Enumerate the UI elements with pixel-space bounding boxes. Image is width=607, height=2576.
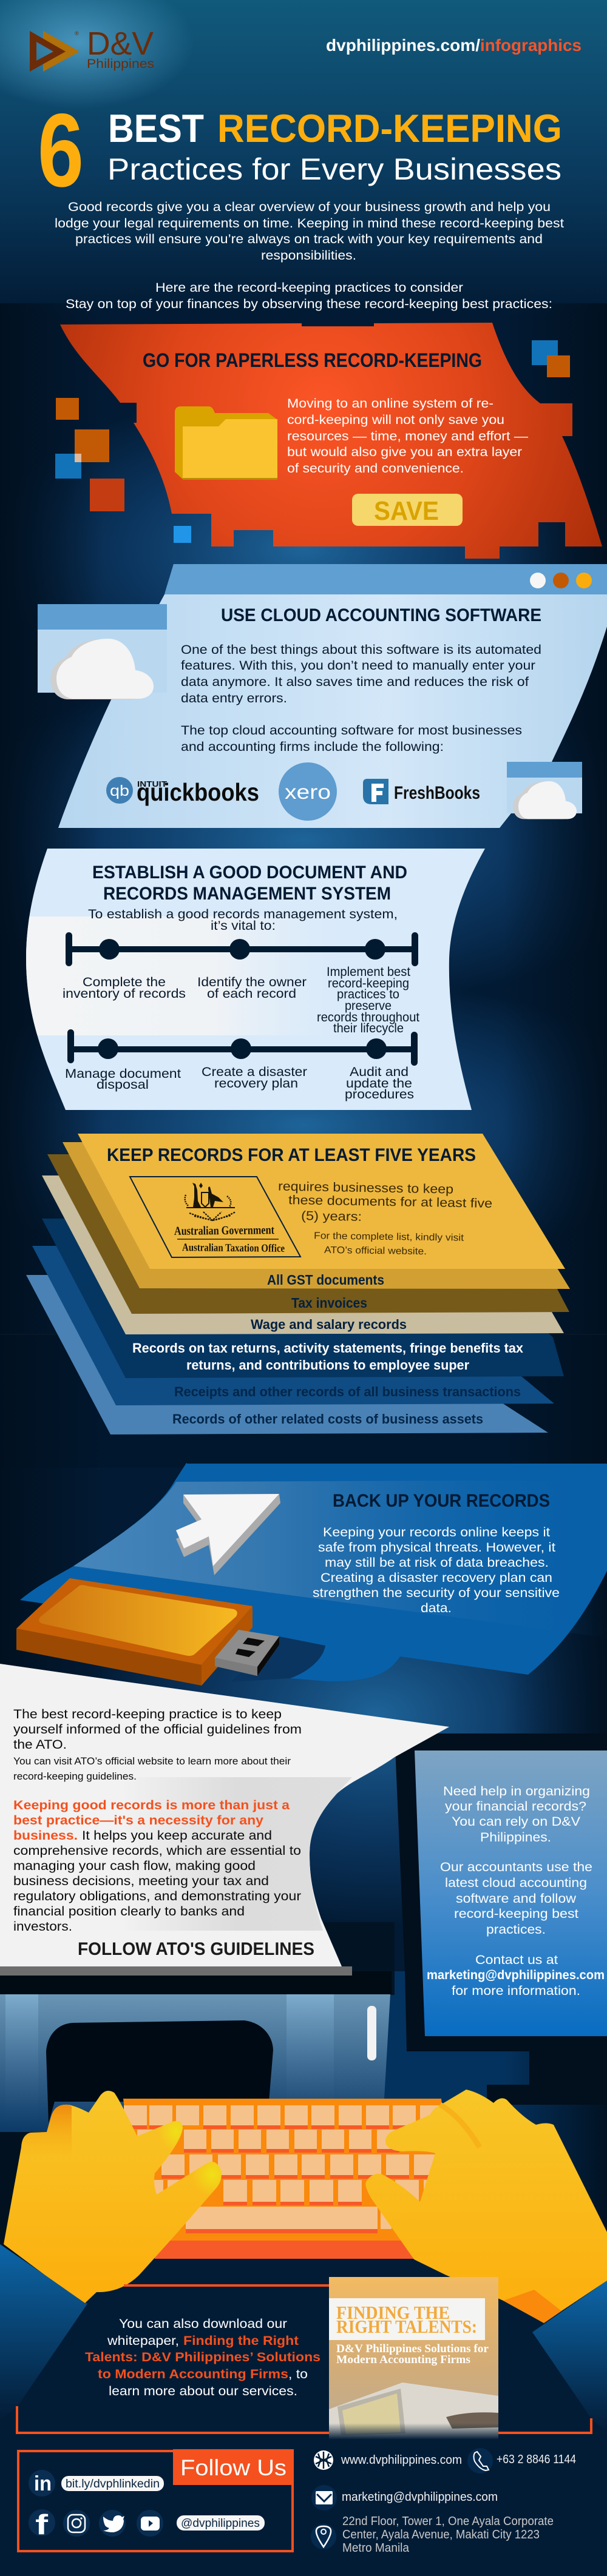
contact details: marketing@dvphilippines.com [342,2490,498,2504]
whitepaper cover: FINDING THE [336,2302,450,2323]
layer: top sheet [78,1134,565,1269]
decorative pixels [55,340,570,543]
intro paragraph: lodge your legal requirements on time. Keeping in mind these record-keeping best [55,216,564,230]
panel: follow ATO guidelines: regulatory obligations, and demonstrating your [13,1889,301,1903]
layer: tax returns: returns, and contributions to employee super [186,1357,469,1373]
panel: follow ATO guidelines: You can visit ATO’s official website to learn more about their [13,1755,291,1767]
whitepaper cover: Modern Accounting Firms [336,2353,470,2366]
panel: whitepaper frame [17,2277,592,2440]
linkedin pill: bit.ly/dvphlinkedin [66,2478,160,2490]
website url: infographics [480,36,582,55]
logo: D&V Philippines [30,25,154,72]
heading [92,863,407,904]
panel: follow us [18,2449,294,2551]
panel: monitor call to action: Philippines. [480,1830,551,1845]
layer: GST documents: All GST documents [267,1272,384,1288]
layer: business transactions: Receipts and other records of all business transactions [174,1384,521,1399]
requirement text [278,1180,492,1257]
layer: wage and salary: Wage and salary records [251,1317,407,1332]
icon: right hand [365,2090,607,2323]
panel: back up your records [20,1463,607,1682]
icon: small cloud window [507,762,582,819]
laptop screen [0,1994,390,2132]
body text: may still be at risk of data breaches. [325,1556,549,1570]
layer: GST documents [63,1142,570,1289]
body text: resources — time, money and effort — [287,429,529,443]
timeline top labels: records throughout [317,1011,419,1024]
panel: go for paperless [55,323,602,559]
timeline bottom labels: recovery plan [214,1077,298,1091]
icon: linkedin [29,2470,55,2497]
layer: tax invoices [47,1154,569,1314]
website url: dvphilippines.com/ [326,36,480,55]
whitepaper text: You can also download our [119,2316,287,2331]
timeline top labels: their lifecycle [333,1021,404,1035]
timeline top labels: of each record [207,987,296,1001]
contact details: 22nd Floor, Tower 1, One Ayala Corporate [342,2515,554,2528]
whitepaper cover: D&V Philippines Solutions for [336,2342,489,2355]
panel: follow ATO guidelines: managing your cash flow, making good [13,1858,256,1873]
icon: folder [175,406,277,480]
body text: strengthen the security of your sensitive [313,1586,560,1600]
layer: tax returns [42,1219,564,1378]
intro text: it’s vital to: [211,919,276,933]
icon: coat of arms [185,1183,236,1220]
orange shape [60,323,602,559]
timeline top labels: Implement best [327,965,410,979]
panel: cloud accounting [38,564,607,828]
panel: monitor call to action: software and follow [456,1891,577,1906]
timeline bottom labels [65,1065,414,1101]
heading: KEEP RECORDS FOR AT LEAST FIVE YEARS [107,1145,476,1165]
save button [352,494,463,526]
heading: GO FOR PAPERLESS RECORD-KEEPING [143,349,482,371]
panel: follow ATO guidelines: record-keeping guidelines. [13,1771,137,1782]
ATO logo box [130,1177,300,1257]
layer: business assets [26,1275,548,1434]
body text: data. [421,1601,452,1615]
body text [313,1525,560,1615]
body text: and accounting firms include the following: [181,739,444,754]
timeline bottom labels: disposal [97,1078,149,1092]
icon: instagram [63,2510,90,2537]
panel: document management system [24,849,485,1110]
contact details [311,2448,576,2555]
panel: monitor call to action: Contact us at [475,1952,558,1967]
timeline bottom [67,1029,418,1066]
timeline top labels: Identify the owner [197,975,307,989]
requirement text: requires businesses to keep [278,1180,453,1197]
whitepaper text: , to [288,2367,308,2381]
panel: monitor call to action: practices. [486,1922,546,1937]
body text: of security and convenience. [287,461,464,476]
monitor frame and stand [0,1734,607,2105]
panel: follow ATO guidelines: investors. [13,1919,72,1934]
timeline bottom labels: Create a disaster [202,1065,307,1079]
ATO logo box: Australian Taxation Office [182,1241,285,1254]
logo: quickbooks: quickbooks [137,778,259,806]
timeline bottom labels: Audit and [350,1065,409,1079]
icon: twitter [99,2510,126,2537]
requirement text: ATO’s official website. [324,1245,427,1257]
panel: monitor call to action: Our accountants use the [440,1860,592,1874]
title: Practices for Every Businesses [107,152,561,186]
timeline bottom labels: procedures [345,1088,414,1101]
body text: cord-keeping will not only save you [287,412,504,427]
title: BEST [108,106,204,150]
heading: RECORDS MANAGEMENT SYSTEM [103,884,391,904]
body text: The top cloud accounting software for most businesses [181,723,522,738]
timeline top labels: preserve [345,999,392,1013]
contact details: +63 2 8846 1144 [497,2453,576,2466]
title [38,92,562,209]
body text: Creating a disaster recovery plan can [320,1571,552,1585]
whitepaper text [85,2316,320,2398]
whitepaper text: Talents: D&V Philippines’ Solutions [85,2350,320,2364]
intro text [88,907,398,933]
timeline bottom labels: Manage document [65,1067,181,1081]
timeline bottom labels: update the [346,1077,412,1091]
body text: One of the best things about this software is its automated [181,642,541,657]
panel: follow ATO guidelines: business decisions, meeting your tax and [13,1874,269,1888]
window dots [530,573,592,588]
intro paragraph: Good records give you a clear overview of your business growth and help you [68,200,551,214]
intro text: To establish a good records management system, [88,907,398,921]
timeline top labels: Complete the [83,975,166,989]
layer: business transactions [32,1246,554,1405]
timeline top labels [63,965,419,1035]
whitepaper text: Finding the Right [183,2333,299,2348]
panel: monitor call to action: latest cloud accounting [445,1875,587,1890]
panel: follow ATO guidelines: the ATO. [13,1737,67,1752]
panel: follow ATO guidelines: comprehensive records, which are essential to [13,1843,301,1858]
timeline top [66,932,418,966]
layer: wage and salary [42,1175,564,1334]
website url [326,36,582,55]
panel: follow ATO guidelines [0,1664,449,1976]
icon: left cloud window [38,604,167,699]
layer: business assets: Records of other related costs of business assets [172,1411,483,1427]
panel: monitor call to action [415,1750,607,2036]
logo: D&V Philippines: D&V [87,25,154,62]
body text: data anymore. It also saves time and reduces the risk of [181,674,529,689]
icon: facebook: f [35,2509,49,2540]
panel: monitor call to action: for more information. [452,1983,580,1998]
logo: freshbooks: FreshBooks [394,783,480,803]
heading: Follow Us [180,2455,287,2480]
logo: xero: xero [285,781,331,803]
panel: follow ATO guidelines: Keeping good records is more than just a [13,1798,290,1812]
requirement text: (5) years: [301,1209,362,1224]
panel: follow ATO guidelines: It helps you keep accurate and [82,1828,272,1843]
intro paragraph [55,200,564,311]
layer: tax returns: Records on tax returns, activity statements, fringe benefits tax [132,1340,524,1356]
contact details: Metro Manila [342,2541,410,2555]
whitepaper text: to Modern Accounting Firms [98,2367,288,2381]
whitepaper text: learn more about our services. [109,2384,297,2398]
intro paragraph: practices will ensure you’re always on track with your key requirements and [75,232,543,246]
panel: follow ATO guidelines: best practice—it's a necessity for any [13,1813,263,1828]
panel: monitor call to action: You can rely on D&V [452,1814,581,1829]
intro paragraph: responsibilities. [261,248,356,263]
title: RECORD-KEEPING [217,106,562,150]
drop shadow [231,1636,325,1682]
contact details: Center, Ayala Avenue, Makati City 1223 [342,2528,540,2541]
panel: keep records stacked layers [26,1134,570,1434]
logo: xero [279,762,337,821]
title: 6 [38,92,84,209]
body text: but would also give you an extra layer [287,445,522,459]
panel: follow ATO guidelines: business. [13,1828,78,1843]
requirement text: these documents for at least five [288,1193,492,1211]
icon: facebook [29,2509,55,2540]
save button: SAVE [374,496,439,526]
icon: left hand [4,2091,233,2303]
whitepaper cover: RIGHT TALENTS: [336,2316,477,2337]
layer: tax invoices: Tax invoices [291,1295,367,1311]
panel: follow ATO guidelines: The best record-keeping practice is to keep [13,1707,282,1721]
body text: safe from physical threats. However, it [318,1541,555,1555]
heading: ESTABLISH A GOOD DOCUMENT AND [92,863,407,883]
body text: data entry errors. [181,691,287,705]
heading: BACK UP YOUR RECORDS [333,1491,550,1511]
icon: globe [314,2450,333,2470]
requirement text: For the complete list, kindly visit [314,1231,464,1243]
body text: features. With this, you don’t need to manually enter your [181,658,535,673]
timeline top labels: practices to [337,987,399,1001]
icon: cursor arrow [176,1494,280,1575]
icon: phone [467,2448,493,2473]
timeline top labels: record-keeping [328,977,409,990]
logo: quickbooks [106,777,259,806]
body text [181,642,541,754]
panel: monitor call to action: Need help in organizing [443,1784,590,1798]
panel: follow ATO guidelines: financial position clearly to banks and [13,1904,245,1919]
logo: quickbooks: qb [110,782,129,799]
panel: follow ATO guidelines: yourself informed of the official guidelines from [13,1722,302,1737]
whitepaper cover [329,2277,498,2440]
panel: monitor call to action: record-keeping best [454,1906,578,1921]
icon: usb drive [16,1578,279,1686]
contact details: www.dvphilippines.com [341,2453,462,2467]
logo: freshbooks [363,779,480,804]
icon: youtube [137,2510,163,2537]
panel: monitor call to action: your financial records? [445,1799,586,1814]
handle pill: @dvphilippines [181,2517,260,2530]
ATO logo box: Australian Government [174,1223,274,1238]
body text: Moving to an online system of re- [287,396,493,411]
icon: mail [311,2485,337,2510]
body text [287,396,529,476]
logo: D&V Philippines: ® [75,30,79,36]
heading: FOLLOW ATO'S GUIDELINES [78,1939,314,1959]
sleeves [0,2244,607,2432]
intro paragraph: Stay on top of your finances by observing these record-keeping best practices: [66,297,552,311]
whitepaper text: whitepaper, [107,2333,179,2348]
timeline top labels: inventory of records [63,987,186,1001]
intro paragraph: Here are the record-keeping practices to consider [155,280,463,295]
body text: Keeping your records online keeps it [323,1525,550,1539]
logo: D&V Philippines: Philippines [87,57,154,71]
heading: USE CLOUD ACCOUNTING SOFTWARE [221,605,541,625]
logo: quickbooks: INTUIT [137,779,167,789]
icon: linkedin: in [34,2472,52,2495]
icon: map pin [311,2524,336,2549]
keyboard [123,2099,448,2259]
